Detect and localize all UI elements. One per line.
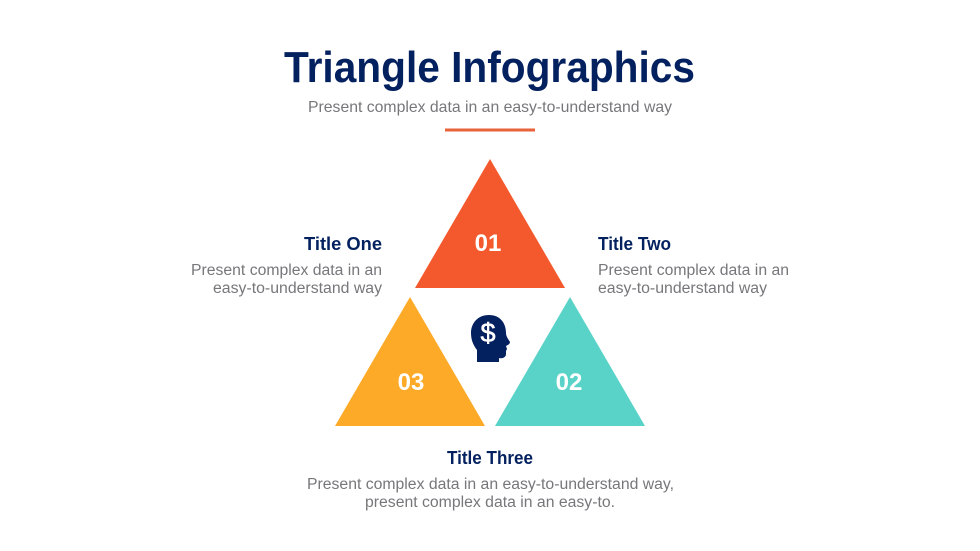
text block: title two: Title Two (598, 234, 671, 254)
text block: title two: Present complex data in an (598, 262, 789, 279)
icon: head with dollar sign (471, 315, 510, 362)
title: Triangle Infographics (284, 43, 695, 92)
subtitle: Present complex data in an easy-to-understand way (308, 99, 672, 116)
text block: title three: Present complex data in an easy-to-understand way, (307, 476, 674, 493)
text block: title one (191, 234, 382, 297)
triangle 01 (415, 159, 565, 288)
accent rule (445, 128, 535, 132)
triangle 03: 03 (398, 369, 424, 396)
triangle 01: 01 (475, 230, 501, 257)
text block: title three: Title Three (447, 448, 533, 468)
text block: title one: Present complex data in an (191, 262, 382, 279)
text block: title one: Title One (304, 234, 382, 254)
triangle 03 (335, 297, 485, 426)
text block: title one: easy-to-understand way (213, 280, 382, 297)
text block: title two (598, 234, 789, 297)
triangle 02: 02 (556, 369, 582, 396)
text block: title three (307, 448, 674, 511)
text block: title three: present complex data in an easy-to. (365, 494, 615, 511)
text block: title two: easy-to-understand way (598, 280, 767, 297)
triangle 02 (495, 297, 645, 426)
icon: head with dollar sign: $ (480, 318, 496, 348)
